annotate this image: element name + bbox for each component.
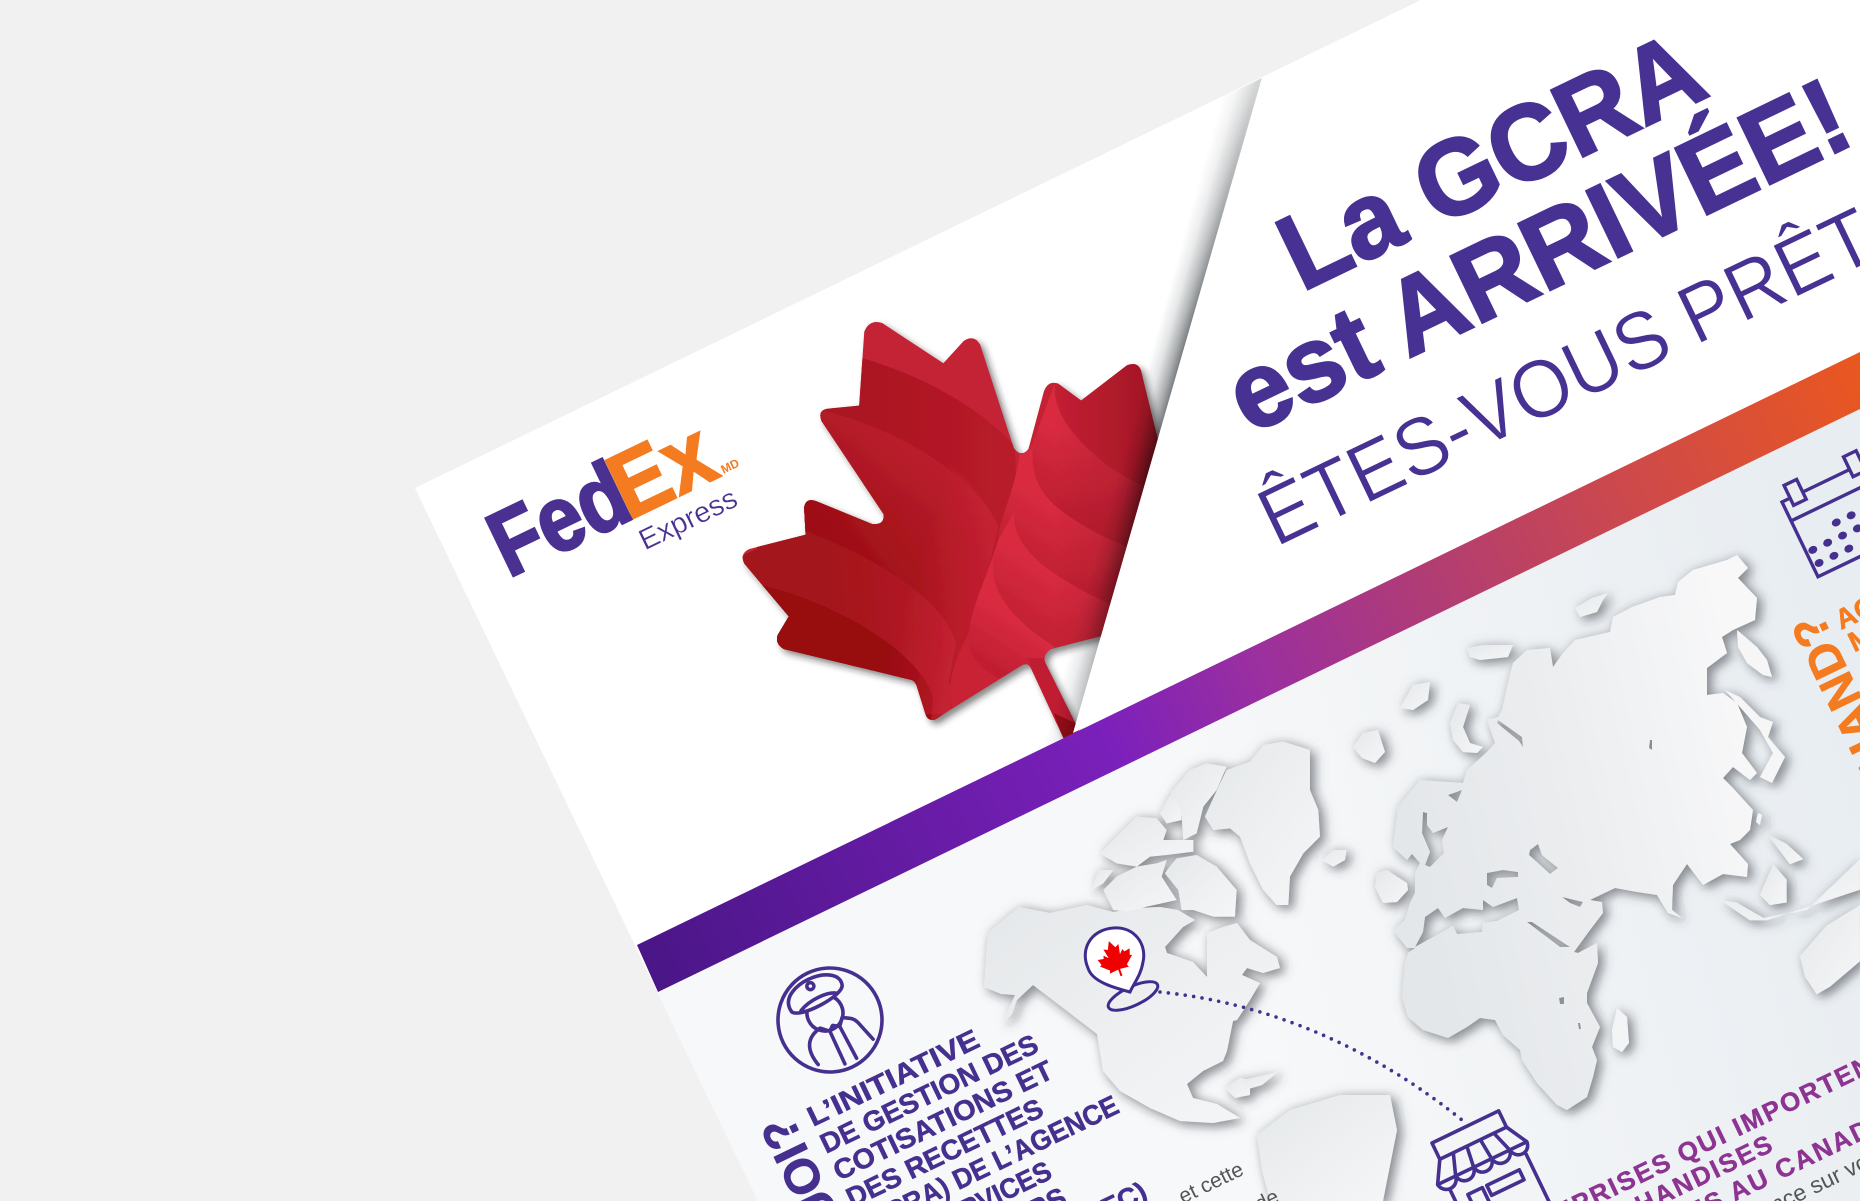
logo: FedEx Express: Express xyxy=(634,482,742,557)
title line 1: La GCRA xyxy=(1260,7,1722,313)
Caribbean xyxy=(1225,1078,1250,1098)
Arctic and Greenland xyxy=(1092,742,1347,917)
panel: title panel xyxy=(1073,0,1860,733)
islands xyxy=(1353,730,1385,763)
Oceania xyxy=(1720,834,1860,994)
logo: FedEx Express xyxy=(472,391,759,615)
icon: storefront xyxy=(1420,1106,1558,1201)
paper sheet xyxy=(415,0,1860,1201)
logo: FedEx Express: MD xyxy=(719,456,742,477)
title xyxy=(1139,0,1860,564)
icon: calendar xyxy=(1776,433,1860,577)
text: what is CARM: COTISATIONS ET xyxy=(828,1054,1058,1186)
world map xyxy=(984,555,1860,1201)
icon: maple leaf xyxy=(732,306,1176,745)
Eurasia and Africa xyxy=(1393,555,1757,1110)
South America xyxy=(1257,1095,1397,1201)
icon: Canada map pin xyxy=(1085,928,1161,1016)
logo: FedEx Express: Fed xyxy=(472,441,645,596)
icon: customs officer xyxy=(761,951,899,1089)
body panel xyxy=(657,409,1860,1201)
dotted route xyxy=(1160,992,1462,1120)
text: what is CARM: L’INITIATIVE xyxy=(802,1023,984,1132)
logo: FedEx Express: Ex xyxy=(592,400,731,539)
gradient band xyxy=(637,352,1860,992)
text: what is CARM: DE GESTION DES xyxy=(815,1028,1043,1159)
crease shadow xyxy=(1051,78,1262,744)
text: what is CARM xyxy=(802,981,1163,1201)
text: body copy left xyxy=(1175,1149,1283,1201)
North America xyxy=(984,905,1280,1123)
